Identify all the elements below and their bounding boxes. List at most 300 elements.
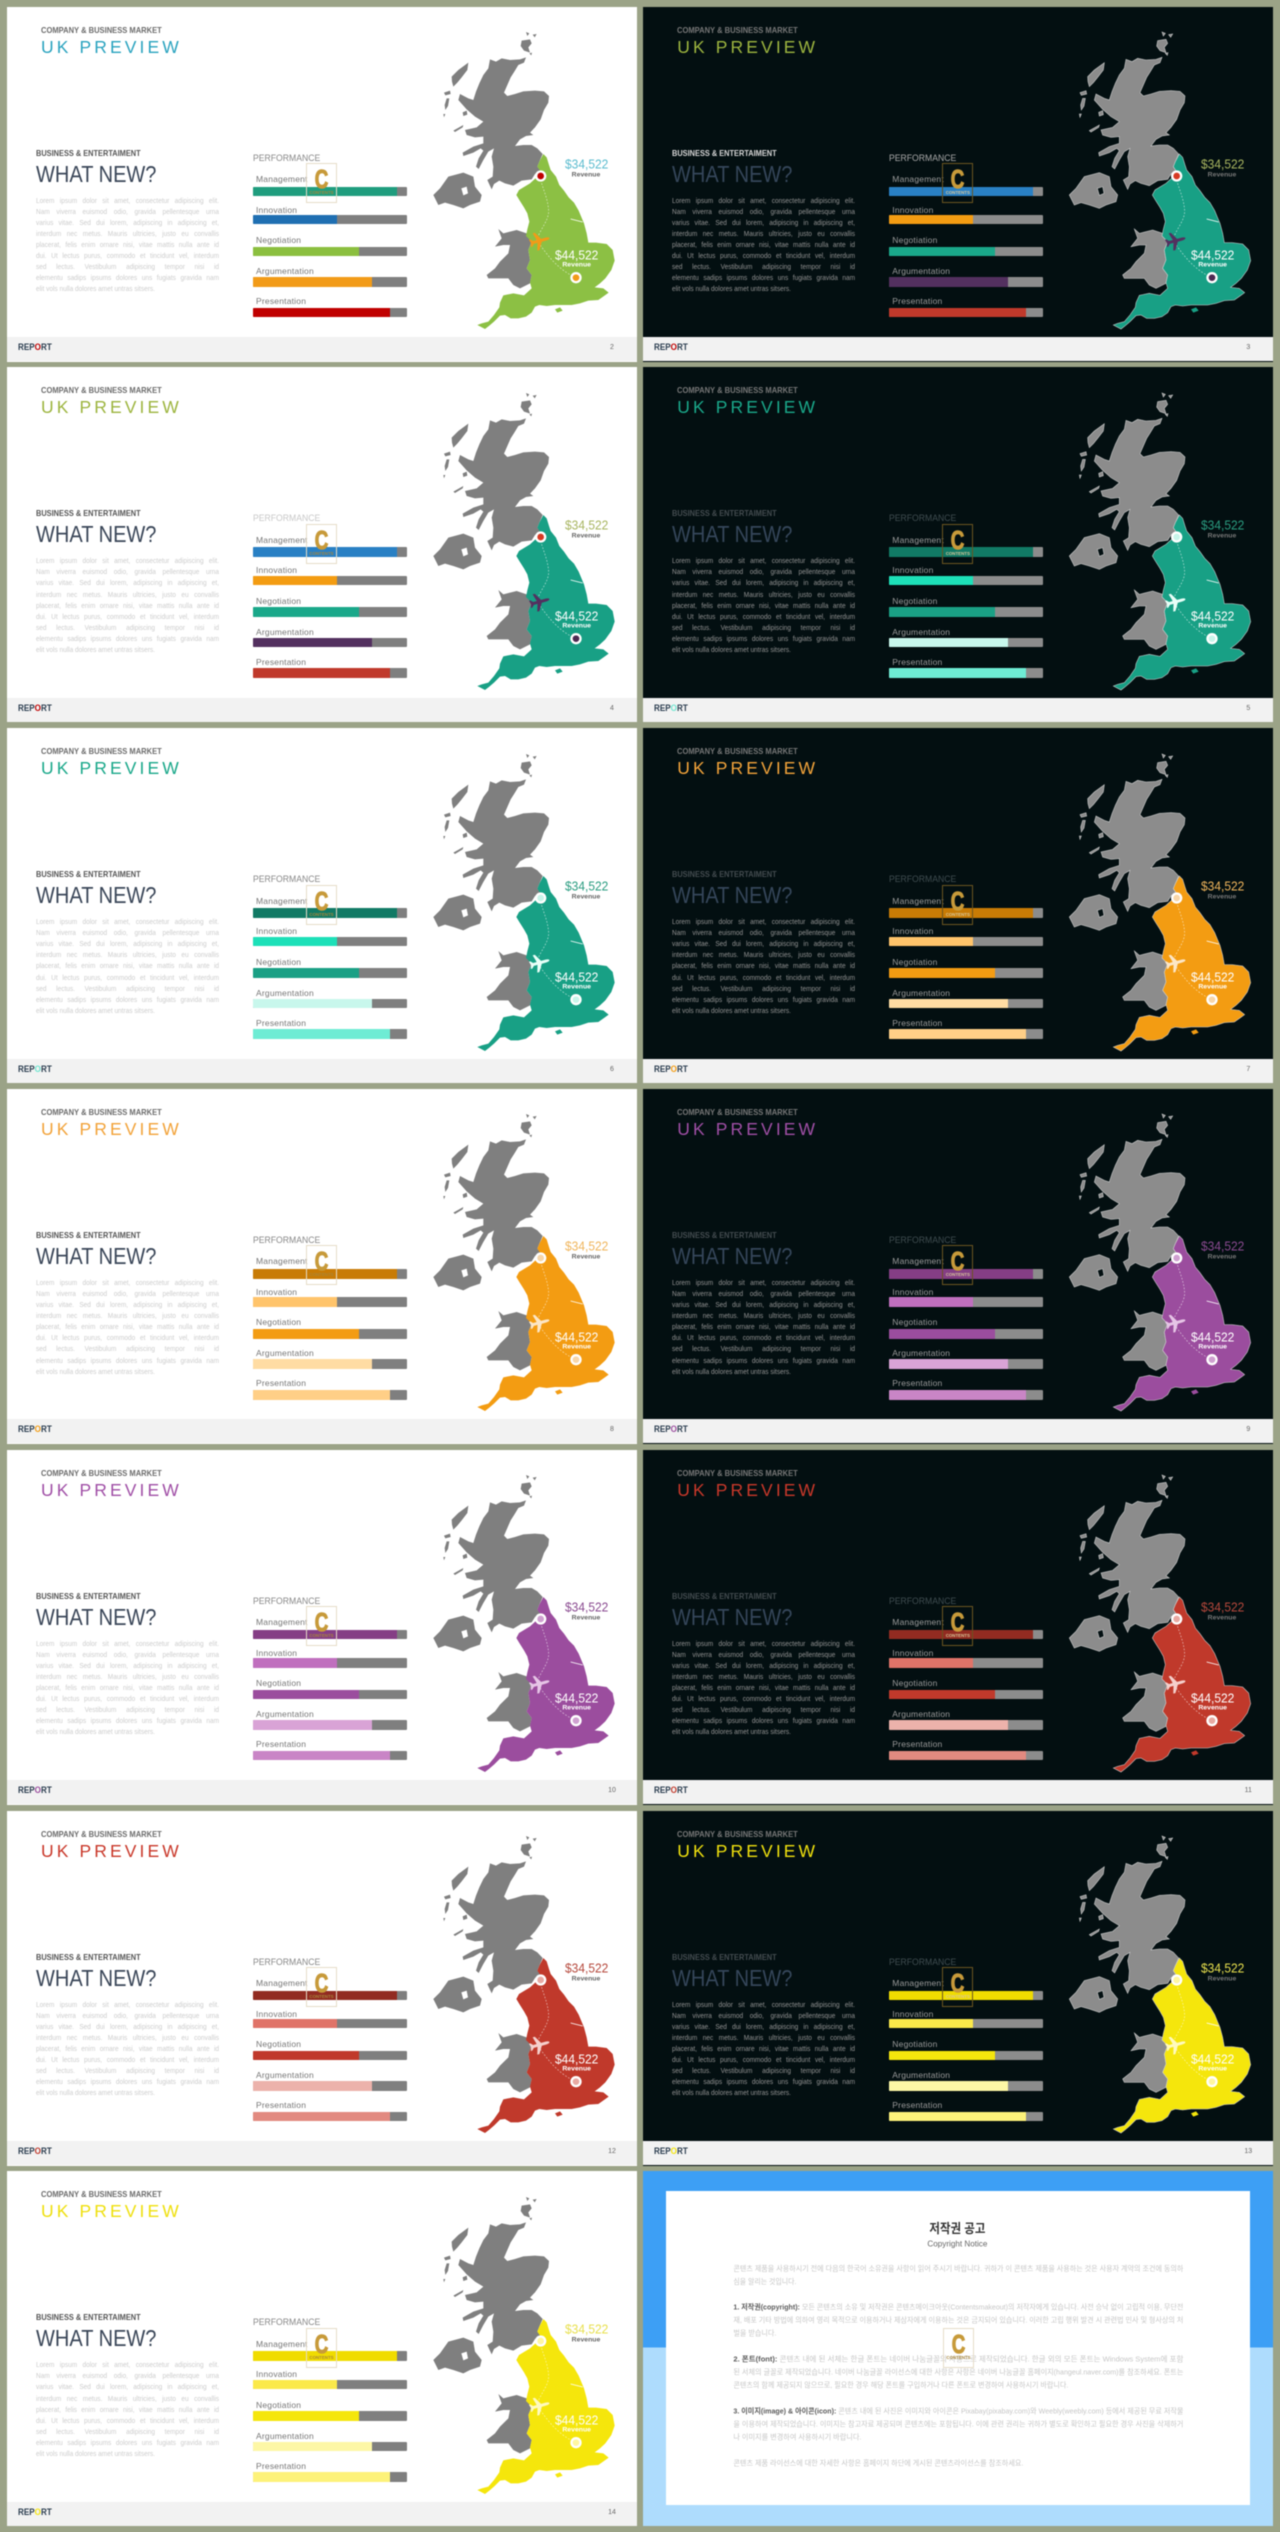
- footer: [643, 337, 1273, 361]
- heading: company label: COMPANY & BUSINESS MARKET: [41, 25, 162, 35]
- bar: Management: [889, 1256, 1043, 1279]
- slide: page 9: [643, 1089, 1273, 1444]
- icon: logo watermark: [306, 2328, 337, 2368]
- bar: Management: Management: [256, 896, 308, 906]
- map: UK: Revenue: [572, 2336, 601, 2343]
- map: UK: [432, 754, 616, 1052]
- bar: Innovation: Innovation: [892, 1287, 934, 1297]
- map: UK: [1068, 31, 1252, 330]
- footer: [643, 698, 1273, 722]
- title: UK PREVIEW: [41, 1119, 182, 1139]
- notice paragraphs: 재, 배포 기타 방법에 의하여 영리 목적으로 이용하거나 제삼자에게 이용하는 것은 금지되어 있습니다. 이러한 고립 행위 발견 시 관련법 민사 및 형사상의 처: [734, 2315, 1184, 2325]
- footer: 9: [1246, 1426, 1250, 1433]
- bar: Argumentation: [253, 1709, 407, 1732]
- footer: [7, 698, 637, 722]
- bar: Innovation: Innovation: [892, 205, 934, 215]
- bar: Argumentation: Argumentation: [256, 266, 314, 276]
- icon: logo watermark: CONTENTS: [946, 2355, 971, 2360]
- bar: Negotiation: Negotiation: [892, 235, 938, 245]
- icon: logo watermark: [943, 2328, 974, 2368]
- subheading: BUSINESS & ENTERTAIMENT: [36, 2312, 141, 2322]
- footer: 4: [610, 705, 614, 712]
- text block: lorem: elementu sadips ipsums dolores uns fugiats gravida nam: [672, 1716, 855, 1725]
- text block: lorem: interdum nec metus. Mauris ultricies, justo eu convallis: [672, 229, 855, 238]
- footer: REPORT: [654, 1424, 688, 1434]
- text block: lorem: interdum nec metus. Mauris ultricies, justo eu convallis: [36, 590, 219, 599]
- bar: Presentation: Presentation: [256, 657, 306, 667]
- heading: company label: COMPANY & BUSINESS MARKET: [677, 1107, 798, 1117]
- icon: logo watermark: [306, 1967, 337, 2007]
- bar: Presentation: Presentation: [256, 2100, 306, 2110]
- slide: page 12: [7, 1810, 637, 2166]
- text block: lorem: [672, 196, 856, 293]
- text block: lorem: elit vols nulla dolores amet untras sitsers.: [672, 2088, 791, 2097]
- icon: logo watermark: [942, 163, 973, 203]
- bar: Presentation: Presentation: [256, 296, 306, 306]
- bar: Innovation: Innovation: [892, 2009, 934, 2019]
- bar: Argumentation: [889, 1709, 1043, 1732]
- map: UK: Revenue: [572, 1615, 601, 1622]
- map: UK: Revenue: [1199, 2066, 1228, 2073]
- bar: Negotiation: Negotiation: [892, 1317, 938, 1327]
- icon: logo watermark: CONTENTS: [309, 1633, 334, 1638]
- heading: what new: WHAT NEW?: [36, 160, 156, 186]
- performance heading: PERFORMANCE: [253, 874, 320, 885]
- title: UK PREVIEW: [677, 397, 818, 417]
- heading: what new: WHAT NEW?: [36, 1604, 156, 1630]
- bar: Argumentation: [889, 1348, 1043, 1371]
- text block: lorem: elit vols nulla dolores amet untras sitsers.: [36, 1367, 155, 1376]
- notice title: 저작권 공고: [930, 2221, 986, 2236]
- text block: lorem: Nam viverra euismod odio, gravida pellentesque urna: [36, 2011, 219, 2020]
- bar: Argumentation: [888, 627, 1044, 648]
- footer: 10: [608, 1787, 616, 1794]
- bar: Innovation: [889, 1648, 1043, 1671]
- text block: lorem: dui. Ut lectus purus, commodo et tincidunt vel, interdum: [36, 973, 219, 982]
- footer: 13: [1244, 2148, 1252, 2155]
- icon: logo watermark: [942, 1606, 973, 1646]
- footer: REPORT: [654, 1785, 688, 1795]
- footer: 14: [608, 2509, 616, 2516]
- bar: Negotiation: [253, 2400, 407, 2423]
- title: UK PREVIEW: [41, 1840, 182, 1860]
- subheading: BUSINESS & ENTERTAIMENT: [672, 1952, 777, 1962]
- text block: lorem: varius vitae. Sed dui lorem, adipiscing in adipiscing et,: [36, 2382, 219, 2391]
- text block: lorem: placerat, felis enim ornare nisi, vitae mattis nulla ante id: [672, 1322, 855, 1331]
- bar: Management: Management: [892, 1978, 944, 1988]
- bar: Innovation: [252, 926, 408, 947]
- heading: company label: COMPANY & BUSINESS MARKET: [677, 25, 798, 35]
- bar: Innovation: [253, 1648, 407, 1671]
- bar: Management: [888, 535, 1044, 558]
- subheading: BUSINESS & ENTERTAIMENT: [672, 148, 777, 158]
- text block: lorem: [36, 1277, 219, 1377]
- heading: what new: WHAT NEW?: [36, 2325, 156, 2351]
- bar: Management: Management: [892, 1617, 944, 1627]
- text block: lorem: interdum nec metus. Mauris ultricies, justo eu convallis: [36, 950, 219, 959]
- bar: Management: Management: [892, 174, 944, 184]
- bar: Negotiation: [253, 2039, 407, 2062]
- heading: company label: COMPANY & BUSINESS MARKET: [677, 1829, 798, 1839]
- text block: lorem: sed lectus. Vestibulum adipiscing tempor nisi id: [36, 2427, 219, 2436]
- bar: Presentation: [889, 1378, 1043, 1401]
- icon: logo watermark: C: [951, 525, 965, 555]
- footer: REPORT: [654, 703, 688, 713]
- text block: lorem: elementu sadips ipsums dolores uns fugiats gravida nam: [36, 1356, 219, 1365]
- bar: Management: [889, 1617, 1043, 1640]
- bar: Management: [889, 1978, 1043, 2001]
- map: UK: Revenue: [1199, 262, 1228, 269]
- text block: lorem: placerat, felis enim ornare nisi, vitae mattis nulla ante id: [672, 2044, 855, 2053]
- bar: Management: [888, 896, 1044, 919]
- title: UK PREVIEW: [677, 1480, 818, 1500]
- title: UK PREVIEW: [677, 758, 818, 778]
- bar: Management: [253, 1617, 407, 1640]
- bar: Presentation: Presentation: [256, 1018, 306, 1028]
- map: UK: [1056, 1102, 1276, 1422]
- notice paragraphs: [734, 2263, 1184, 2468]
- bar: Management: [888, 174, 1044, 197]
- notice paragraphs: 나 이미지를 변경하여 사용하시기 바랍니다.: [734, 2432, 862, 2442]
- text block: lorem: Nam viverra euismod odio, gravida pellentesque urna: [36, 207, 219, 216]
- text block: lorem: Nam viverra euismod odio, gravida pellentesque urna: [672, 2011, 855, 2020]
- text block: lorem: varius vitae. Sed dui lorem, adipiscing in adipiscing et,: [672, 1661, 855, 1670]
- footer: REPORT: [18, 2146, 52, 2156]
- title: UK PREVIEW: [677, 1840, 818, 1860]
- map: UK: $44,522: [555, 2052, 598, 2067]
- bar: Negotiation: [252, 235, 408, 257]
- bar: Presentation: [889, 1739, 1043, 1762]
- white notice card: [666, 2191, 1250, 2505]
- text block: lorem: interdum nec metus. Mauris ultricies, justo eu convallis: [672, 590, 855, 599]
- subheading: BUSINESS & ENTERTAIMENT: [672, 1230, 777, 1240]
- map: UK: Revenue: [572, 1254, 601, 1261]
- text block: lorem: dui. Ut lectus purus, commodo et tincidunt vel, interdum: [672, 1333, 855, 1342]
- bar: Innovation: [252, 205, 408, 225]
- map: UK: $34,522: [565, 1600, 608, 1615]
- text block: lorem: Lorem ipsum dolor sit amet, consectetur adipiscing elit.: [36, 1639, 219, 1648]
- subheading: BUSINESS & ENTERTAIMENT: [36, 148, 141, 158]
- bar: Argumentation: [252, 266, 408, 288]
- map: UK: $44,522: [1191, 1330, 1235, 1345]
- map: UK: $34,522: [1201, 1239, 1245, 1254]
- map: UK: Revenue: [572, 532, 601, 539]
- footer: REPORT: [654, 1064, 688, 1074]
- bar: Presentation: [889, 2100, 1043, 2123]
- text block: lorem: interdum nec metus. Mauris ultricies, justo eu convallis: [672, 1311, 855, 1320]
- icon: logo watermark: C: [315, 2329, 328, 2359]
- bar: Negotiation: Negotiation: [256, 1678, 301, 1688]
- footer: [7, 337, 637, 361]
- text block: lorem: sed lectus. Vestibulum adipiscing tempor nisi id: [36, 262, 219, 271]
- map: UK: $34,522: [1201, 157, 1245, 172]
- bar: Argumentation: Argumentation: [256, 1709, 314, 1719]
- bar: Management: Management: [256, 2339, 308, 2349]
- bar: Negotiation: [253, 1678, 407, 1701]
- bar: Argumentation: Argumentation: [256, 2431, 314, 2441]
- icon: logo watermark: CONTENTS: [946, 912, 970, 917]
- text block: lorem: elementu sadips ipsums dolores uns fugiats gravida nam: [36, 2438, 219, 2447]
- performance heading: PERFORMANCE: [889, 1956, 957, 1968]
- text block: lorem: placerat, felis enim ornare nisi, vitae mattis nulla ante id: [36, 601, 219, 610]
- subheading: BUSINESS & ENTERTAIMENT: [672, 508, 777, 518]
- subheading: BUSINESS & ENTERTAIMENT: [36, 1952, 141, 1962]
- heading: what new: WHAT NEW?: [36, 1243, 156, 1269]
- map: UK: Revenue: [1208, 172, 1237, 179]
- text block: lorem: [36, 556, 219, 654]
- map: UK: $34,522: [565, 878, 608, 893]
- icon: logo watermark: C: [951, 1246, 965, 1276]
- map: UK: $44,522: [555, 969, 598, 984]
- map: UK: Revenue: [562, 1344, 592, 1351]
- text block: lorem: Lorem ipsum dolor sit amet, consectetur adipiscing elit.: [36, 196, 219, 204]
- footer: [7, 2141, 637, 2165]
- bar: Management: Management: [256, 1978, 308, 1988]
- bar: Argumentation: Argumentation: [892, 2070, 950, 2080]
- footer: [7, 1059, 637, 1083]
- heading: company label: COMPANY & BUSINESS MARKET: [677, 746, 798, 756]
- bar: Negotiation: Negotiation: [256, 596, 301, 606]
- footer: [643, 2141, 1273, 2165]
- notice paragraphs: 을 이용하여 제작되었습니다. 이미지는 참고자료 제공되며 콘텐츠에는 포함됩니다. 이에 관련 권리는 귀하가 별도로 확인하고 필요한 경우 사진을 삭제하거: [734, 2419, 1184, 2429]
- text block: lorem: sed lectus. Vestibulum adipiscing tempor nisi id: [36, 1344, 219, 1353]
- bar: Presentation: [889, 1018, 1043, 1041]
- text block: lorem: interdum nec metus. Mauris ultricies, justo eu convallis: [36, 229, 219, 238]
- text block: lorem: interdum nec metus. Mauris ultricies, justo eu convallis: [36, 1311, 219, 1320]
- bar: Negotiation: Negotiation: [256, 2039, 301, 2049]
- map: UK: $34,522: [565, 517, 608, 532]
- text block: lorem: [36, 196, 219, 293]
- bar: Presentation: Presentation: [892, 1018, 942, 1028]
- bar: Innovation: [253, 1287, 407, 1310]
- title: UK PREVIEW: [41, 36, 182, 56]
- map: UK: Revenue: [1208, 1615, 1237, 1622]
- bar: Presentation: [253, 1739, 407, 1762]
- text block: lorem: dui. Ut lectus purus, commodo et tincidunt vel, interdum: [36, 2055, 219, 2064]
- text block: lorem: sed lectus. Vestibulum adipiscing tempor nisi id: [672, 1344, 855, 1353]
- map: UK: Revenue: [572, 172, 601, 179]
- bar: Negotiation: [888, 596, 1044, 618]
- bar: Innovation: Innovation: [256, 205, 297, 215]
- map: UK: [432, 32, 616, 330]
- icon: logo watermark: C: [315, 886, 328, 916]
- performance heading: PERFORMANCE: [889, 874, 957, 885]
- map: UK: $44,522: [555, 1330, 598, 1345]
- text block: lorem: [672, 1998, 855, 2098]
- heading: company label: COMPANY & BUSINESS MARKET: [677, 1468, 798, 1478]
- map: UK: $44,522: [1191, 1691, 1235, 1706]
- notice paragraphs: 벌을 받습니다.: [734, 2328, 777, 2338]
- text block: lorem: placerat, felis enim ornare nisi, vitae mattis nulla ante id: [36, 2044, 219, 2053]
- icon: logo watermark: CONTENTS: [309, 190, 334, 195]
- map: UK: $34,522: [565, 1239, 608, 1254]
- text block: lorem: [36, 917, 219, 1015]
- footer: REPORT: [18, 703, 52, 713]
- text block: lorem: Nam viverra euismod odio, gravida pellentesque urna: [36, 1289, 219, 1298]
- footer: [7, 1419, 637, 1443]
- text block: lorem: elementu sadips ipsums dolores uns fugiats gravida nam: [36, 2077, 219, 2086]
- bar: Innovation: Innovation: [256, 2009, 297, 2019]
- bar: Presentation: Presentation: [256, 2461, 306, 2471]
- text block: lorem: placerat, felis enim ornare nisi, vitae mattis nulla ante id: [672, 961, 855, 970]
- bar: Presentation: Presentation: [892, 1378, 942, 1388]
- footer: 12: [608, 2148, 616, 2155]
- map: UK: Revenue: [1199, 1705, 1228, 1712]
- slide: page 8: [7, 1089, 637, 1444]
- heading: company label: COMPANY & BUSINESS MARKET: [41, 1829, 162, 1839]
- bar: Negotiation: [252, 957, 408, 979]
- text block: lorem: elit vols nulla dolores amet untras sitsers.: [36, 1006, 155, 1015]
- text block: lorem: Nam viverra euismod odio, gravida pellentesque urna: [36, 1650, 219, 1659]
- performance heading: PERFORMANCE: [253, 2317, 320, 2328]
- bar: Management: Management: [256, 535, 308, 545]
- footer: REPORT: [18, 1424, 52, 1434]
- text block: lorem: placerat, felis enim ornare nisi, vitae mattis nulla ante id: [36, 240, 219, 249]
- text block: lorem: interdum nec metus. Mauris ultricies, justo eu convallis: [672, 2033, 855, 2042]
- text block: lorem: dui. Ut lectus purus, commodo et tincidunt vel, interdum: [672, 1694, 855, 1703]
- map: UK: Revenue: [562, 983, 592, 990]
- bar: Argumentation: Argumentation: [256, 2070, 314, 2080]
- title: UK PREVIEW: [41, 397, 182, 417]
- title: UK PREVIEW: [41, 758, 182, 778]
- map: UK: Revenue: [562, 2426, 592, 2433]
- bar: Negotiation: [889, 1678, 1043, 1701]
- footer: 11: [1245, 1787, 1252, 1794]
- map: UK: Revenue: [562, 262, 592, 269]
- map: UK: $44,522: [1191, 969, 1235, 984]
- text block: lorem: dui. Ut lectus purus, commodo et tincidunt vel, interdum: [36, 1333, 219, 1342]
- icon: logo watermark: CONTENTS: [946, 1272, 970, 1277]
- map: UK: Revenue: [562, 622, 592, 629]
- map: UK: $34,522: [565, 1961, 608, 1976]
- bar: Management: Management: [892, 535, 944, 545]
- text block: lorem: [36, 1998, 219, 2098]
- text block: lorem: placerat, felis enim ornare nisi, vitae mattis nulla ante id: [672, 1683, 855, 1692]
- slide: page 11: [643, 1450, 1273, 1805]
- performance heading: PERFORMANCE: [889, 1596, 957, 1607]
- map: UK: $44,522: [555, 248, 598, 263]
- heading: company label: COMPANY & BUSINESS MARKET: [41, 746, 162, 756]
- bar: Negotiation: Negotiation: [256, 2400, 301, 2410]
- notice paragraphs: 3. 이미지(image) & 아이콘(icon): 콘텐츠 내에 된 사진은 이미지와 아이콘은 Pixabay(pixabay.com)와 Weebly(weebly.com) 등에서 제공된 무료 저작물: [734, 2406, 1184, 2416]
- text block: lorem: interdum nec metus. Mauris ultricies, justo eu convallis: [36, 2033, 219, 2042]
- map: UK: Revenue: [1199, 983, 1228, 990]
- text block: lorem: dui. Ut lectus purus, commodo et tincidunt vel, interdum: [36, 1694, 219, 1703]
- bar: Innovation: Innovation: [256, 2369, 297, 2379]
- heading: what new: WHAT NEW?: [672, 160, 793, 186]
- text block: lorem: placerat, felis enim ornare nisi, vitae mattis nulla ante id: [36, 2405, 219, 2414]
- bar: Presentation: Presentation: [892, 2100, 942, 2110]
- text block: lorem: placerat, felis enim ornare nisi, vitae mattis nulla ante id: [672, 601, 855, 610]
- map: UK: Revenue: [1208, 893, 1237, 900]
- map: UK: $44,522: [1191, 608, 1235, 623]
- text block: lorem: varius vitae. Sed dui lorem, adipiscing in adipiscing et,: [672, 1300, 855, 1309]
- slide: page 13: [643, 1810, 1273, 2166]
- bar: Negotiation: Negotiation: [892, 2039, 938, 2049]
- text block: lorem: [672, 1638, 855, 1738]
- bar: Presentation: [253, 2461, 407, 2484]
- footer: 3: [1246, 344, 1250, 351]
- text block: lorem: Lorem ipsum dolor sit amet, consectetur adipiscing elit.: [36, 556, 219, 565]
- performance heading: PERFORMANCE: [253, 513, 320, 524]
- heading: what new: WHAT NEW?: [672, 521, 793, 547]
- icon: logo watermark: CONTENTS: [946, 1633, 970, 1638]
- bar: Innovation: [253, 2369, 407, 2392]
- bar: Management: [253, 2339, 407, 2362]
- bar: Argumentation: [889, 2070, 1043, 2093]
- heading: what new: WHAT NEW?: [672, 1243, 793, 1269]
- map: UK: Revenue: [562, 2066, 592, 2073]
- bar: Management: [252, 174, 408, 197]
- footer: [643, 1780, 1273, 1804]
- bar: Argumentation: [252, 988, 408, 1009]
- footer: [643, 1059, 1273, 1083]
- text block: lorem: elit vols nulla dolores amet untras sitsers.: [36, 645, 155, 654]
- icon: logo watermark: CONTENTS: [946, 551, 970, 556]
- text block: lorem: dui. Ut lectus purus, commodo et tincidunt vel, interdum: [672, 2055, 855, 2064]
- icon: logo watermark: [306, 524, 337, 564]
- footer: 7: [1246, 1066, 1250, 1073]
- map: UK: Revenue: [1199, 1344, 1228, 1351]
- text block: lorem: elementu sadips ipsums dolores uns fugiats gravida nam: [36, 634, 219, 643]
- bar: Innovation: [253, 2009, 407, 2032]
- text block: lorem: Nam viverra euismod odio, gravida pellentesque urna: [672, 1289, 855, 1298]
- text block: lorem: varius vitae. Sed dui lorem, adipiscing in adipiscing et,: [36, 1661, 219, 1670]
- footer: REPORT: [18, 1064, 52, 1074]
- text block: lorem: elementu sadips ipsums dolores uns fugiats gravida nam: [672, 2077, 855, 2086]
- text block: lorem: [36, 1638, 219, 1738]
- map: UK: $34,522: [565, 157, 608, 172]
- bar: Management: [253, 1978, 407, 2001]
- text block: lorem: sed lectus. Vestibulum adipiscing tempor nisi id: [672, 262, 855, 271]
- text block: lorem: elit vols nulla dolores amet untras sitsers.: [36, 284, 155, 293]
- text block: lorem: varius vitae. Sed dui lorem, adipiscing in adipiscing et,: [672, 218, 855, 227]
- slide: page 2: [7, 6, 637, 362]
- bar: Management: [252, 896, 408, 919]
- text block: lorem: dui. Ut lectus purus, commodo et tincidunt vel, interdum: [672, 973, 855, 982]
- text block: lorem: varius vitae. Sed dui lorem, adipiscing in adipiscing et,: [36, 578, 219, 587]
- icon: logo watermark: [942, 524, 973, 564]
- bar: Innovation: Innovation: [256, 926, 297, 936]
- heading: what new: WHAT NEW?: [672, 1964, 793, 1990]
- text block: lorem: elementu sadips ipsums dolores uns fugiats gravida nam: [672, 273, 855, 282]
- map: UK: $34,522: [1201, 1600, 1245, 1615]
- bar: Innovation: [252, 565, 408, 586]
- bar: Negotiation: [888, 957, 1044, 979]
- bar: Presentation: Presentation: [892, 657, 942, 667]
- text block: lorem: Nam viverra euismod odio, gravida pellentesque urna: [672, 207, 855, 216]
- footer: REPORT: [654, 2146, 688, 2156]
- text block: lorem: elit vols nulla dolores amet untras sitsers.: [672, 284, 791, 293]
- bar: Argumentation: [888, 988, 1044, 1009]
- map: UK: [420, 2185, 640, 2505]
- text block: lorem: Nam viverra euismod odio, gravida pellentesque urna: [672, 1650, 855, 1659]
- bar: Innovation: Innovation: [256, 1287, 297, 1297]
- map: UK: [432, 392, 616, 691]
- icon: logo watermark: CONTENTS: [309, 1272, 334, 1277]
- map: UK: $34,522: [1201, 517, 1245, 532]
- map: UK: $44,522: [1191, 2052, 1235, 2067]
- bar: Argumentation: [252, 627, 408, 648]
- map: UK: [1056, 1463, 1276, 1783]
- bar: Negotiation: [252, 596, 408, 618]
- text block: lorem: sed lectus. Vestibulum adipiscing tempor nisi id: [672, 2066, 855, 2075]
- map: UK: Revenue: [562, 1705, 592, 1712]
- text block: lorem: interdum nec metus. Mauris ultricies, justo eu convallis: [36, 2394, 219, 2403]
- heading: what new: WHAT NEW?: [672, 882, 793, 908]
- bar: Management: Management: [892, 896, 944, 906]
- performance heading: PERFORMANCE: [253, 152, 320, 164]
